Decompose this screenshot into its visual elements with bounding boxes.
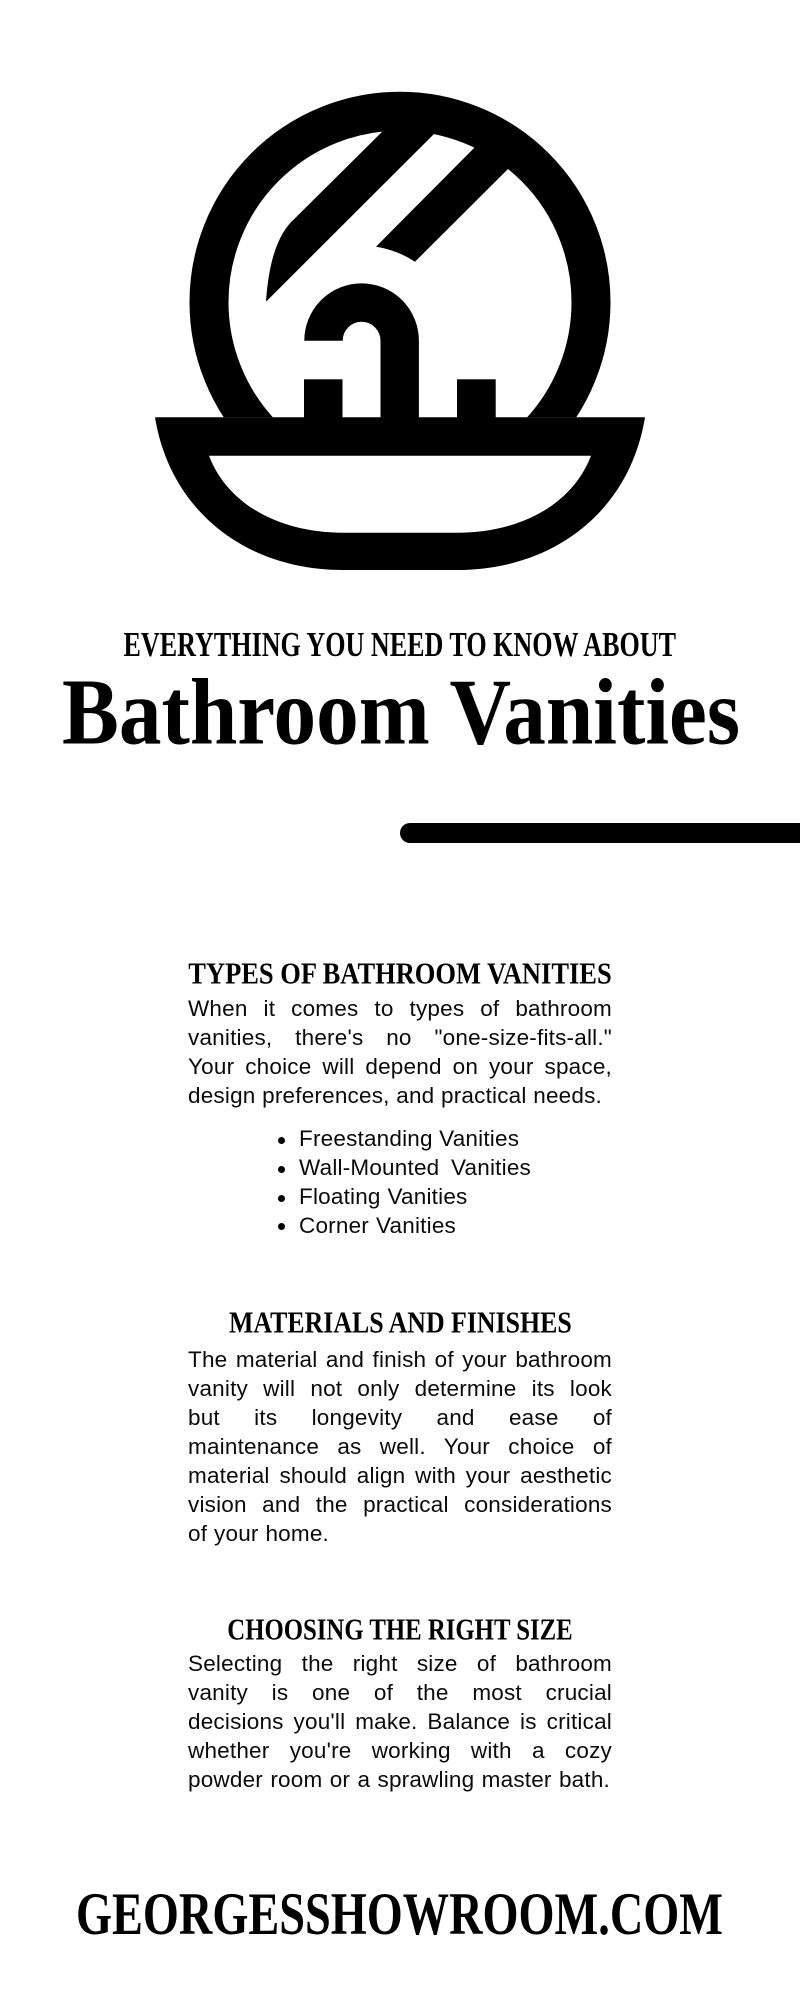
text block: materials: vision and the practical considerations (188, 1492, 612, 1517)
text block: size: powder room or a sprawling master bath. (188, 1767, 610, 1792)
text block: size: decisions you'll make. Balance is critical (188, 1709, 612, 1734)
white cut below counter (150, 417, 650, 577)
mirror ring (209, 111, 591, 493)
bullet list: vanity types: Floating Vanities (299, 1184, 468, 1209)
text block: types intro: When it comes to types of bathroom (188, 996, 612, 1021)
text block: types intro: Your choice will depend on your space, (188, 1054, 612, 1079)
text block: materials: vanity will not only determine its look (188, 1376, 612, 1401)
text block: materials (188, 1347, 612, 1546)
left tap (304, 379, 342, 424)
text block: types intro (188, 996, 612, 1108)
basin (155, 417, 645, 570)
bullet list: vanity types (278, 1126, 531, 1238)
main title: Bathroom Vanities (62, 660, 740, 764)
text block: size: whether you're working with a cozy (188, 1738, 612, 1763)
accent bar (400, 823, 800, 843)
panel: materials and finishes (188, 1305, 612, 1546)
bullet list: vanity types: Corner Vanities (299, 1213, 456, 1238)
text block: size: vanity is one of the most crucial (188, 1680, 612, 1705)
bullet list: vanity types: Freestanding Vanities (299, 1126, 519, 1151)
icon: bathroom vanity with round mirror and faucet (155, 92, 645, 570)
panel: types of bathroom vanities (188, 955, 612, 1238)
text block: size: Selecting the right size of bathroom (188, 1651, 612, 1676)
text block: materials: maintenance as well. Your choice of (188, 1434, 612, 1459)
heading: size: CHOOSING THE RIGHT SIZE (227, 1611, 573, 1646)
mirror reflection leaf (266, 119, 447, 302)
text block: materials: material should align with your aesthetic (188, 1463, 612, 1488)
mirror reflection band (376, 135, 521, 262)
right tap (457, 379, 496, 424)
text block: materials: of your home. (188, 1521, 329, 1546)
text block: size (188, 1651, 612, 1792)
heading: materials: MATERIALS AND FINISHES (229, 1305, 572, 1340)
bullet list: vanity types: Wall-Mounted Vanities (299, 1155, 531, 1180)
text block: types intro: vanities, there's no "one-size-fits-all." (188, 1025, 612, 1050)
text block: materials: The material and finish of your bathroom (188, 1347, 612, 1372)
heading: types: TYPES OF BATHROOM VANITIES (188, 955, 612, 990)
text block: materials: but its longevity and ease of (188, 1405, 612, 1430)
faucet (324, 303, 400, 425)
text block: types intro: design preferences, and practical needs. (188, 1083, 602, 1108)
panel: choosing the right size (188, 1611, 612, 1792)
